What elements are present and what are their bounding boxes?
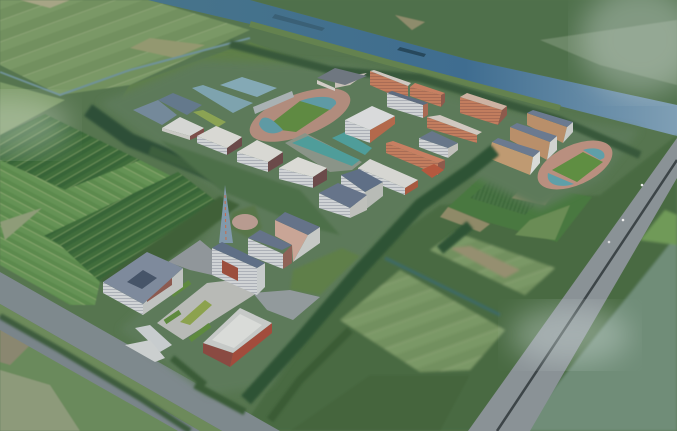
parking south (253, 290, 320, 320)
plaza garden (180, 300, 212, 325)
north small building (317, 68, 367, 91)
farmland: north of river (250, 0, 677, 105)
long white building (358, 159, 418, 195)
solar trio back (527, 110, 573, 143)
dorm building 3 (237, 140, 283, 172)
solar dorm back (341, 169, 383, 210)
brick building G (386, 141, 445, 178)
pond west (192, 85, 253, 113)
campus lawn (290, 248, 360, 295)
west stadium (243, 77, 357, 153)
farmland: bottom right (240, 135, 677, 431)
solar trio middle (510, 123, 557, 160)
plaza (157, 280, 257, 340)
farmland: bottom left (0, 320, 200, 431)
dorm building 2 (197, 126, 242, 155)
flower garden (230, 205, 262, 238)
fog: bottom right (510, 305, 630, 365)
main tower building (212, 242, 265, 295)
solar teaching block right (275, 212, 320, 262)
brick building E (427, 115, 482, 143)
tennis courts (285, 132, 372, 172)
brick building B (410, 83, 445, 107)
pond east (220, 77, 277, 97)
blue-roof halls (133, 93, 202, 125)
lawns between dorms (160, 140, 340, 235)
main road (0, 272, 280, 431)
roadside tree row (0, 316, 190, 431)
tower spire (219, 185, 233, 243)
farmland: left side (0, 82, 225, 305)
red hall (203, 308, 272, 367)
small green court (193, 110, 226, 127)
solar trio front (488, 138, 540, 175)
campus ground (100, 60, 640, 395)
dorm building 1 (162, 117, 204, 140)
parking north (168, 240, 212, 275)
farmland: upper left (0, 0, 330, 110)
entrance gate (125, 325, 172, 362)
crop field beside east stadium (440, 175, 592, 242)
dorm building 4 (279, 157, 327, 188)
north tree band (230, 44, 640, 155)
solar building F (419, 131, 458, 158)
solar teaching block left (248, 230, 292, 269)
river (148, 0, 677, 136)
highway (468, 138, 677, 431)
fog: top right (580, 0, 677, 95)
east stadium (530, 130, 620, 200)
tree belt along southern campus edge (100, 196, 240, 298)
tree band west (88, 110, 300, 205)
plaza hedge (165, 282, 210, 340)
low trees near hall (172, 358, 245, 412)
brick building D (460, 93, 507, 125)
fog: left side (0, 95, 70, 155)
west teaching building (103, 252, 183, 315)
brick building A (370, 70, 411, 102)
gym building north (345, 106, 395, 143)
diagonal tree belt (246, 150, 500, 420)
solar dorm front (319, 183, 367, 218)
white building C (387, 91, 428, 118)
river bank (250, 24, 560, 108)
